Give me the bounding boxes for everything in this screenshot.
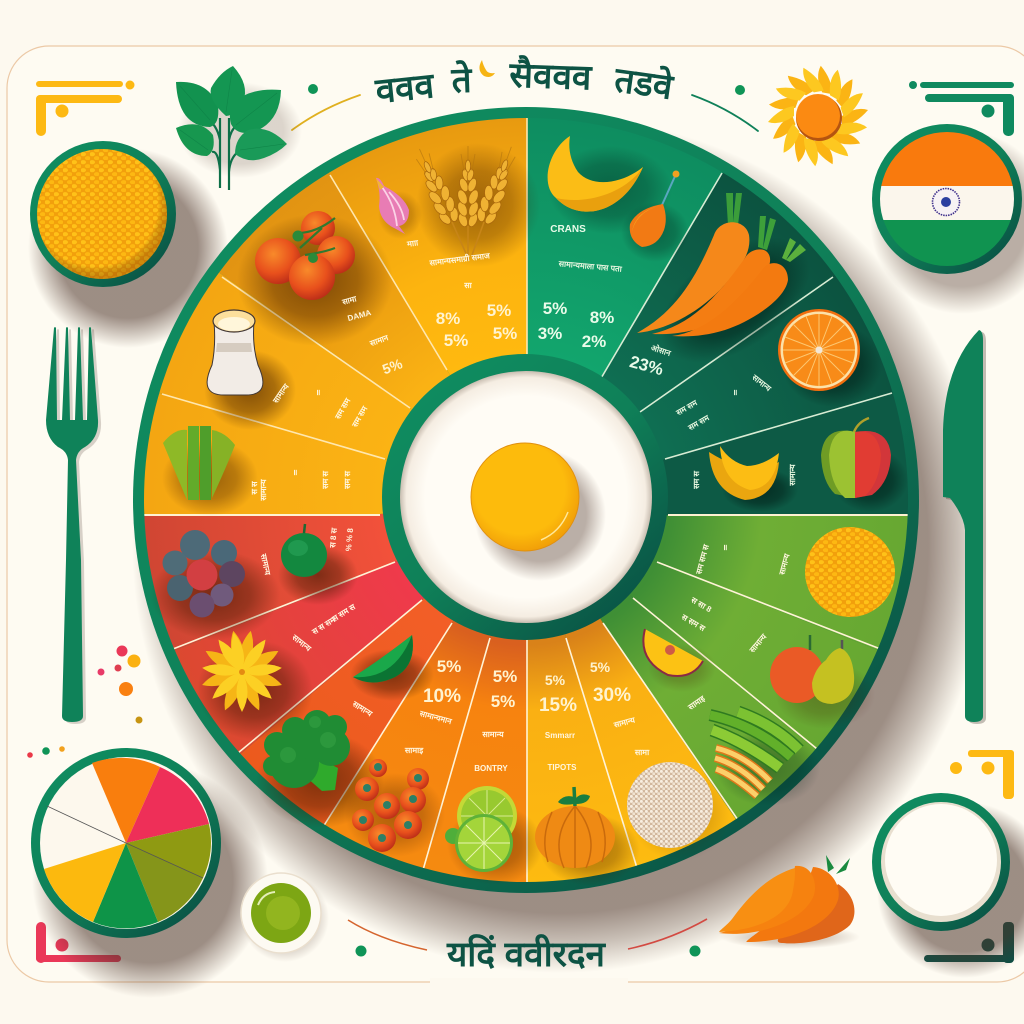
corner mark: bottom right yellow xyxy=(950,750,1014,799)
sector: pumpkin xyxy=(527,634,636,882)
icon: celery xyxy=(162,426,258,516)
wheel labels: सा xyxy=(463,281,473,290)
wheel labels: ॥ xyxy=(316,388,321,397)
icon: knife xyxy=(943,330,986,724)
wheel labels: TIPOTS xyxy=(548,763,577,772)
wedge: olive lower xyxy=(126,843,203,922)
wheel labels: स 8 स xyxy=(328,527,339,549)
wheel labels: 5% xyxy=(590,659,611,675)
sector: celery xyxy=(144,393,387,516)
wheel labels: 10% xyxy=(423,686,461,707)
wheel labels: 15% xyxy=(539,695,577,716)
wheel labels: 2% xyxy=(582,332,606,351)
icon: rice ball xyxy=(627,762,730,861)
corner mark: bottom right dark xyxy=(924,922,1014,963)
wheel labels: 8% xyxy=(436,309,460,328)
wheel labels: 8% xyxy=(590,308,614,327)
wheel labels: 5% xyxy=(487,301,511,320)
sector: crans xyxy=(528,140,722,376)
wheel labels: ॥ xyxy=(723,543,728,552)
wheel labels: 5% xyxy=(437,657,461,676)
center plate xyxy=(382,354,668,640)
wheel labels: सामाइ xyxy=(404,746,424,755)
wedge: orange xyxy=(92,758,160,843)
sector: limes xyxy=(424,636,527,882)
wheel labels: 5% xyxy=(444,331,468,350)
sector: tomatoes xyxy=(219,173,450,410)
wheel labels: सम स xyxy=(692,470,701,490)
wheel labels: 5% xyxy=(380,355,405,377)
wheel labels: 5% xyxy=(491,692,515,711)
wheel labels: 5% xyxy=(493,324,517,343)
wheel labels: सम सम xyxy=(686,413,712,433)
wedge: olive upper xyxy=(126,824,211,878)
wheel labels: सामा xyxy=(634,748,650,757)
icon: small tomatoes xyxy=(345,759,445,857)
wheel labels: सामान्य xyxy=(750,372,773,393)
icon: banana slices xyxy=(709,446,798,512)
wheel labels: स सा 8 xyxy=(689,595,713,614)
icon: India flag bowl xyxy=(870,124,1024,314)
sector: broccoli xyxy=(240,598,454,825)
icon: pumpkin xyxy=(535,787,640,886)
wheel labels: सामान्य xyxy=(290,632,313,653)
sector: flower xyxy=(175,561,424,754)
wheel labels: 5% xyxy=(493,667,517,686)
icon: milk jar xyxy=(204,310,296,430)
icon: green apple xyxy=(278,524,358,605)
chart: nutrition wheel xyxy=(133,107,919,893)
chart: small pie bowl xyxy=(31,748,268,998)
wheel labels: स सम स xyxy=(330,602,357,624)
wheel labels: सम स xyxy=(321,470,330,490)
icon: apple and pear xyxy=(770,635,875,729)
wheel labels: स सम स xyxy=(679,612,707,633)
icon: sun xyxy=(768,65,868,167)
sector: grains xyxy=(328,118,526,376)
wheel labels: सामान्यमाला पास पता xyxy=(557,259,623,274)
yolk circle xyxy=(471,443,606,581)
icon: tomatoes xyxy=(237,211,393,346)
wheel labels: सामान्यसमाग्री समाज xyxy=(428,250,491,268)
title: तडवे xyxy=(611,59,677,107)
sector: carrots xyxy=(603,172,834,411)
icon: broccoli xyxy=(256,710,384,828)
icon: onion xyxy=(376,178,422,239)
wheel labels: सम स xyxy=(343,470,352,490)
sector: apple and pear xyxy=(630,560,878,750)
sector: rice xyxy=(565,618,736,866)
plate shadow xyxy=(132,117,988,973)
decorative dots near fork xyxy=(27,646,143,758)
label: crans: CRANS xyxy=(550,224,586,235)
title decorations xyxy=(292,84,758,131)
wheel labels: सामान्य xyxy=(612,715,636,730)
wheel labels: सम सम xyxy=(350,404,370,430)
wedge: pink xyxy=(126,767,209,843)
sector: milk xyxy=(159,272,412,460)
title: ववव xyxy=(373,66,437,111)
icon: beans and strips xyxy=(710,712,820,806)
icon: seed drop xyxy=(621,170,689,262)
wheel labels: सामान्य xyxy=(788,464,797,487)
wheel labels: सामान्य xyxy=(777,553,792,577)
icon: pepper xyxy=(821,418,908,512)
sector: orange xyxy=(640,274,892,460)
wheel labels: सम सम xyxy=(333,396,353,422)
wheel labels: 23% xyxy=(628,352,665,379)
icon: flower xyxy=(197,630,313,740)
wheel labels: सम सम स xyxy=(694,543,711,576)
wheel labels: सामान्य xyxy=(481,730,504,739)
wheel labels: मााा xyxy=(406,238,420,249)
wedge: green xyxy=(93,843,158,928)
wheel labels: सामाइ xyxy=(686,693,708,712)
wheel labels: स स xyxy=(250,481,259,496)
sector: small tomatoes xyxy=(325,620,490,868)
wedge: yellow xyxy=(44,843,126,922)
wheel labels: 3% xyxy=(538,324,562,343)
icon: berries xyxy=(150,530,280,640)
icon: carrot slices xyxy=(719,855,860,949)
icon: orange slice xyxy=(778,309,882,407)
wheel labels: सामा xyxy=(340,294,358,307)
wheel labels: 30% xyxy=(593,685,631,706)
wheel labels: % % 8 xyxy=(344,527,355,552)
corner mark: top left xyxy=(36,80,134,136)
icon: carrots xyxy=(637,193,832,388)
corner mark: top right xyxy=(909,81,1014,136)
icon: milk bowl xyxy=(872,793,1024,978)
bottom title decorations xyxy=(348,919,707,956)
wheel labels: सामान्य xyxy=(747,632,769,655)
wheel labels: स स सम xyxy=(310,615,338,637)
icon: wheat xyxy=(408,143,540,267)
sector: pepper xyxy=(663,393,908,515)
wheel labels: ॥ xyxy=(733,388,738,397)
title: ते xyxy=(450,60,473,100)
sector: berries xyxy=(144,514,398,650)
icon: peach wedge xyxy=(643,629,716,692)
wheel labels: BONTRY xyxy=(474,764,508,773)
wheel labels: सामान्य xyxy=(259,552,272,576)
sector: beans xyxy=(600,594,816,820)
wheel labels: सामान xyxy=(368,333,390,348)
wheel labels: ओसान xyxy=(650,342,673,358)
title: सैववव xyxy=(508,55,594,97)
wheel labels: Smmarr xyxy=(545,731,575,740)
corner mark: bottom left xyxy=(36,922,121,963)
wheel labels: सामान्य xyxy=(271,382,291,406)
bottom title: यदिं ववीरदन xyxy=(446,934,607,974)
icon: melon wedge xyxy=(350,635,434,701)
wheel labels: सम सम xyxy=(674,398,700,418)
wheel labels: सामान्यमान xyxy=(418,709,453,726)
wheel labels: ॥ xyxy=(293,468,298,477)
title xyxy=(373,55,677,111)
wheel labels: DAMA xyxy=(347,308,372,323)
sector: millet xyxy=(654,515,908,650)
wheel labels: 5% xyxy=(545,672,566,688)
icon: millet disc xyxy=(805,527,895,617)
icon: fork xyxy=(46,327,101,724)
icon: leaf plant xyxy=(176,66,302,190)
wheel labels xyxy=(250,238,797,773)
wheel labels: 5% xyxy=(543,299,567,318)
wheel labels: सामान्य xyxy=(259,479,268,502)
icon: green cup xyxy=(241,873,329,962)
icon: banana crescent xyxy=(548,136,672,234)
wheel labels: सामान्य xyxy=(350,699,374,719)
frame gap under bottom title xyxy=(430,978,628,986)
icon: lime slices xyxy=(445,786,543,885)
icon: lentil bowl xyxy=(28,141,228,348)
